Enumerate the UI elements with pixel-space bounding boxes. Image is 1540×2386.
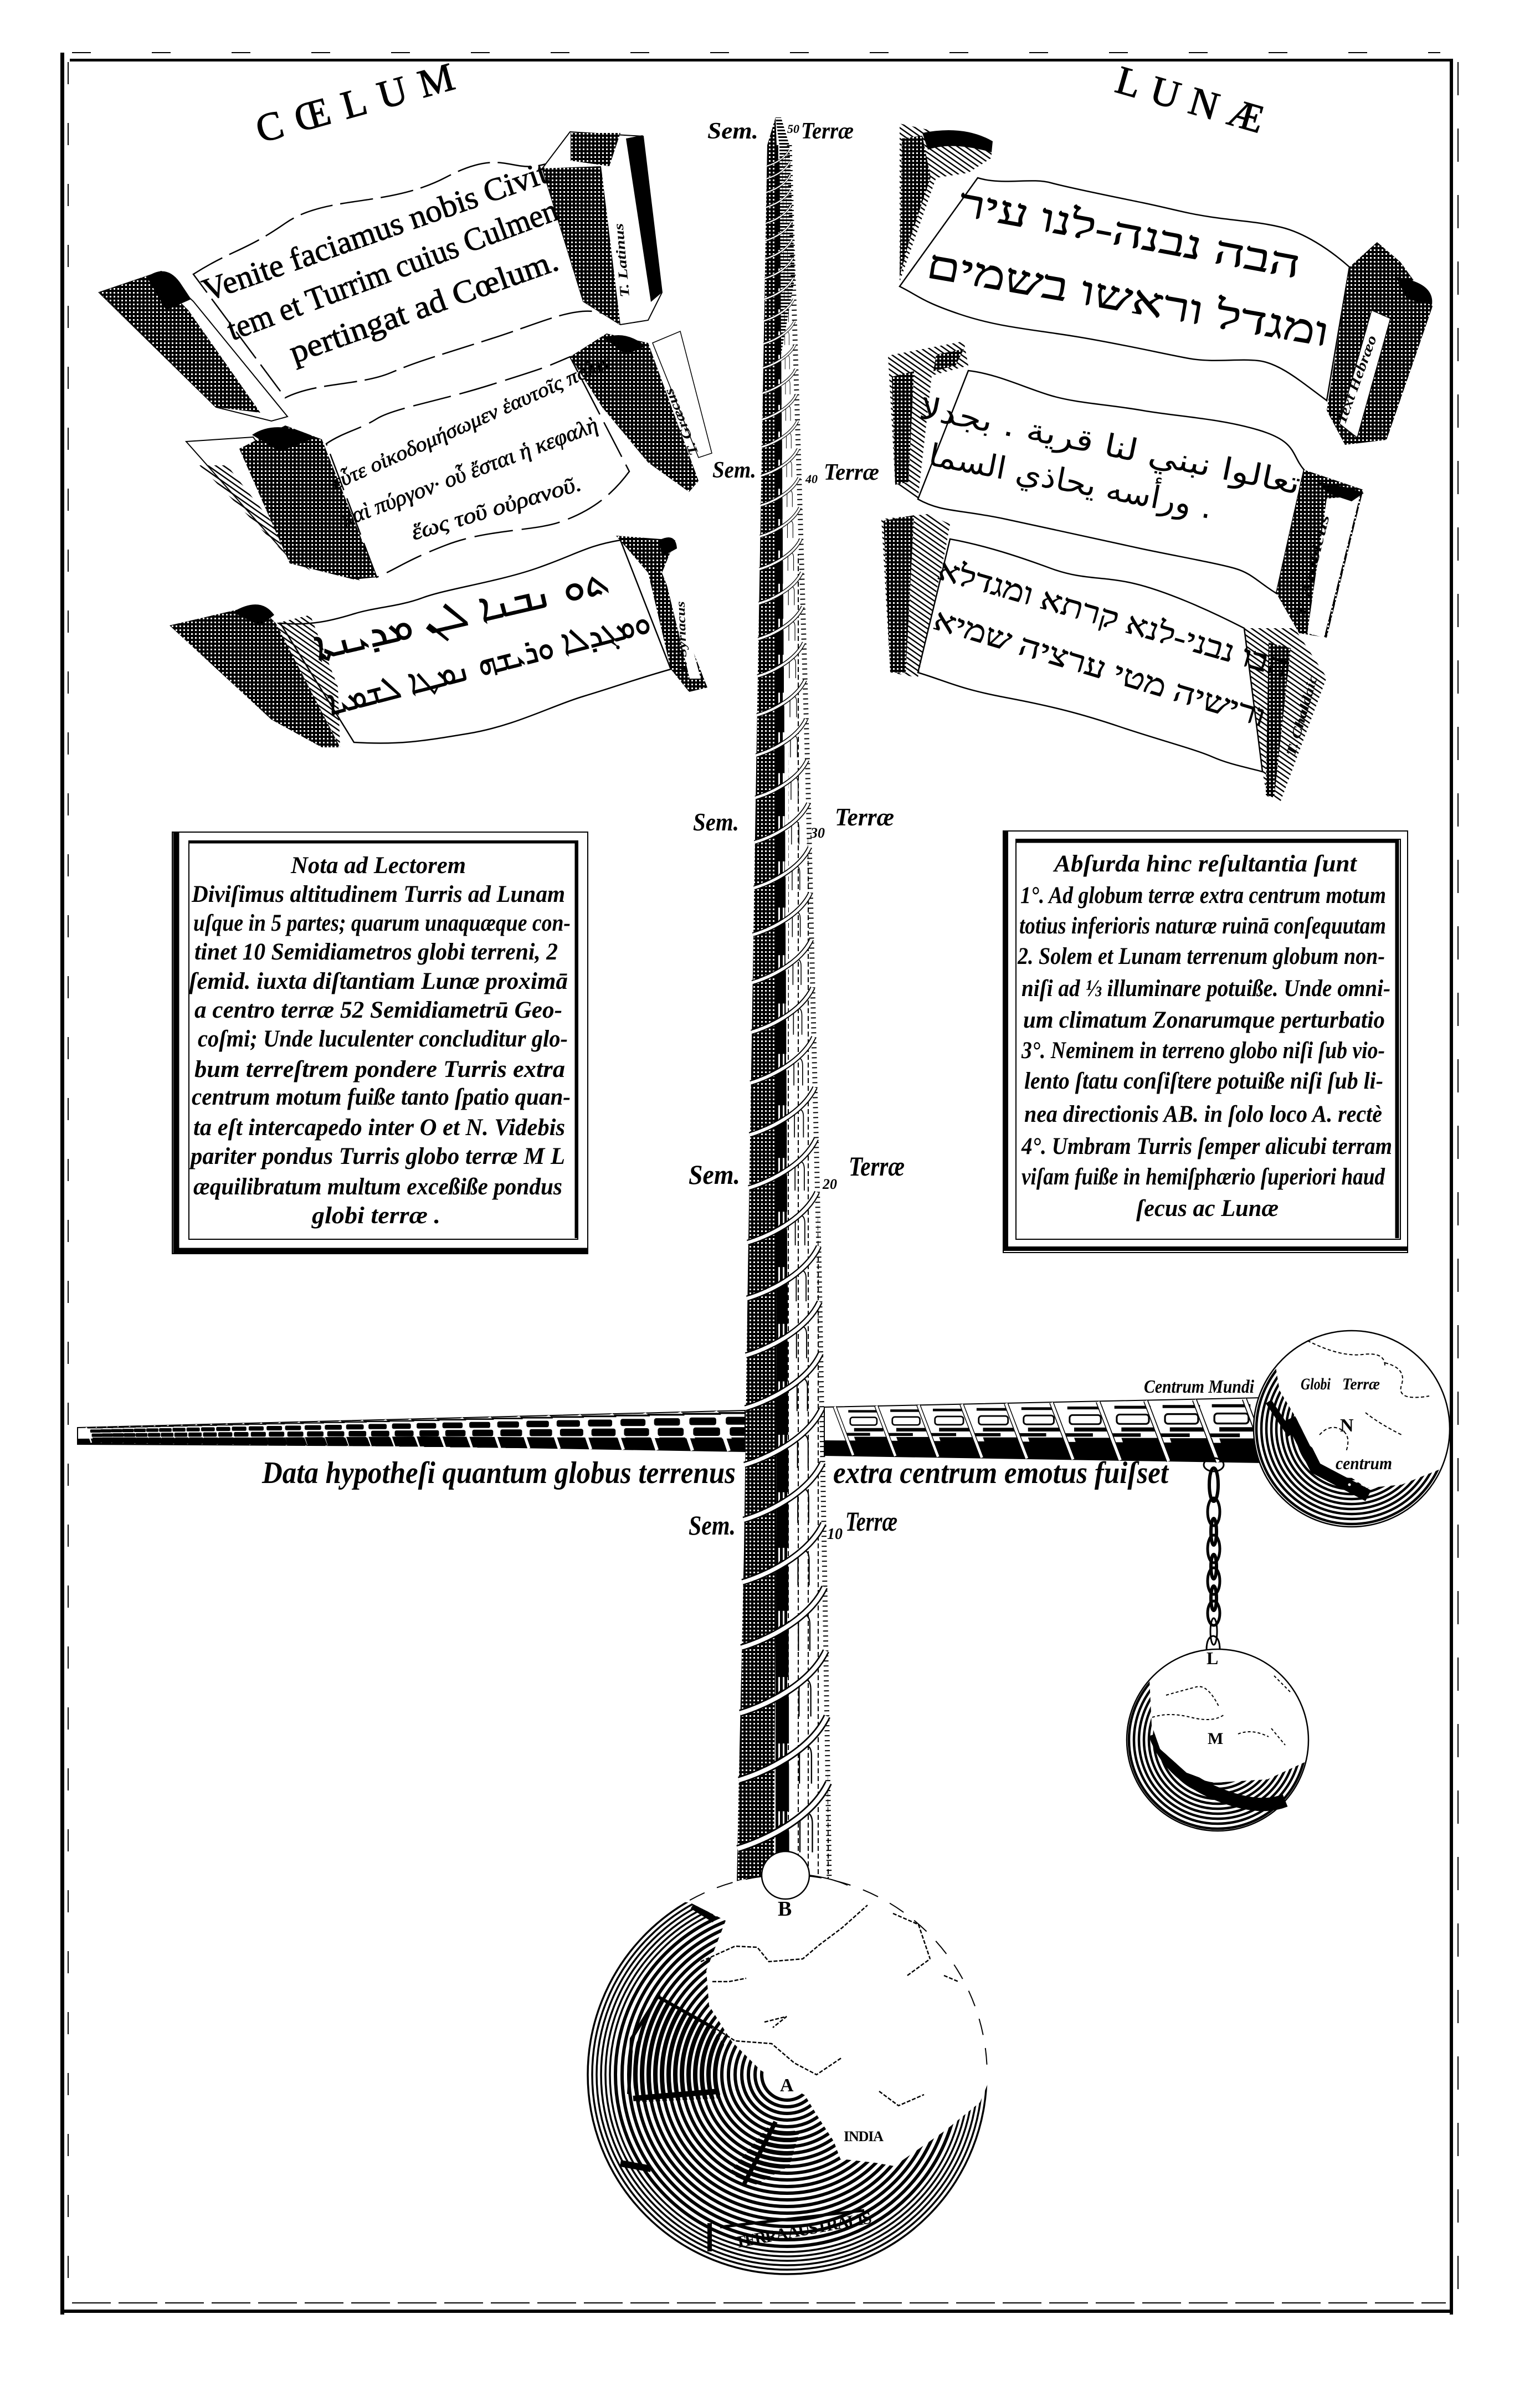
note text: ta eſt intercapedo inter O et N. Videbis	[193, 1115, 565, 1141]
box frame	[172, 832, 588, 1254]
note text: uſque in 5 partes; quarum unaquæque con-	[193, 910, 571, 936]
left roll	[900, 124, 993, 282]
note text: centrum motum fuiße tanto ſpatio quan-	[192, 1084, 571, 1110]
label: 30 semidiameters: Sem.	[693, 808, 739, 836]
scroll: Greek text	[186, 331, 712, 579]
absurdities text: lento ſtatu conſiſtere potuiße niſi ſub li-	[1024, 1068, 1383, 1094]
absurdities text: Abſurda hinc reſultantia ſunt	[1053, 851, 1358, 877]
letter N: N	[1340, 1415, 1354, 1436]
Hebrew inscription	[923, 182, 1332, 355]
Latin inscription	[198, 154, 563, 370]
globe labels: centrum	[1336, 1453, 1392, 1473]
label: 10 semidiameters: 10	[827, 1526, 843, 1543]
Chaldaic inscription: ורישיה מטי ערציה שמיא	[930, 603, 1270, 733]
absurdities text	[1017, 851, 1392, 1222]
label: 10 semidiameters: Terræ	[845, 1506, 897, 1537]
scroll: Arabic text	[888, 341, 1364, 638]
left roll	[170, 604, 340, 747]
letter L: L	[1207, 1648, 1218, 1668]
letter A: A	[780, 2075, 794, 2096]
chain	[1204, 1458, 1224, 1650]
coastlines	[1152, 1676, 1291, 1745]
label: Terra Australis: TERRA AUSTRALIS	[733, 2209, 873, 2252]
note text: coſmi; Unde luculenter concluditur glo-	[198, 1026, 568, 1052]
note text	[188, 853, 571, 1229]
label: 10 semidiameters: Sem.	[689, 1510, 736, 1541]
Arabic inscription: تعالوا نبني لنا قرية . بجدلا	[916, 390, 1303, 502]
Greek inscription: ἕως τοῦ οὐρανοῦ.	[408, 471, 584, 545]
Arabic inscription: ورأسه يحاذي السما .	[926, 434, 1216, 526]
large globe: earth	[587, 1875, 987, 2275]
label: 50 semidiameters: 50	[787, 122, 799, 136]
globe labels: Terræ	[1342, 1375, 1380, 1393]
Latin inscription: tem et Turrim cuius Culmen	[222, 192, 563, 347]
absurdities text: 4°. Umbram Turris ſemper alicubi terram	[1021, 1133, 1392, 1159]
label: Centrum Mundi: Centrum Mundi	[1144, 1377, 1254, 1397]
Greek inscription	[328, 350, 615, 545]
caption: Data hypothesi	[261, 1456, 1169, 1490]
label: T. Syriacus: T. Syriacus	[673, 601, 690, 674]
Chaldaic inscription: הבו נבני-לנא קרתא ומגדלא	[935, 553, 1292, 684]
right roll	[1327, 242, 1433, 445]
Arabic inscription	[916, 390, 1303, 526]
horizontal tower arm, right	[824, 1398, 1323, 1463]
absurdities text: nea directionis AB. in ſolo loco A. rectè	[1024, 1101, 1382, 1127]
shading rings	[1255, 1368, 1439, 1526]
note text: bum terreſtrem pondere Turris extra	[194, 1056, 565, 1082]
label: T. Graecus: T. Græcus	[662, 386, 702, 457]
right roll	[1244, 628, 1327, 801]
label: India: INDIA	[844, 2128, 884, 2144]
label: T. Arabicus: T. Arabicus	[1293, 514, 1333, 619]
title: Coelum: CŒLUM	[251, 53, 465, 151]
Syriac inscription: ܘܡܓܕܠܐ ܘܪܝܫܗ ܢܡܛܐ ܠܫܡܝܐ	[322, 601, 655, 724]
right roll	[1276, 470, 1364, 638]
coastlines	[701, 1905, 958, 2106]
absurdities text: ſecus ac Lunæ	[1136, 1195, 1279, 1222]
box frame	[1003, 831, 1408, 1253]
height labels	[689, 119, 905, 1543]
horizontal tower arm, left	[78, 1410, 764, 1451]
note text: Diviſimus altitudinem Turris ad Lunam	[191, 881, 565, 907]
label: 20 semidiameters: 20	[822, 1176, 837, 1192]
label: 20 semidiameters	[689, 1151, 905, 1192]
note text: Nota ad Lectorem	[290, 853, 466, 879]
caption: Data hypothesi: Data hypotheſi quantum globus terrenus	[261, 1456, 736, 1490]
absurdities text: niſi ad ⅓ illuminare potuiße. Unde omni-	[1021, 976, 1390, 1002]
label: 30 semidiameters: 30	[810, 825, 825, 841]
globe labels: Globi	[1301, 1375, 1331, 1393]
scroll: Chaldaic text	[881, 514, 1327, 801]
Greek inscription: καὶ πύργον· οὗ ἔσται ἡ κεφαλὴ	[337, 412, 601, 531]
label: T. Latinus: T. Latinus	[612, 223, 633, 298]
label: 40 semidiameters: Terræ	[824, 460, 879, 485]
point B circle: B	[778, 1897, 792, 1921]
label: 50 semidiameters: Terræ	[801, 119, 854, 144]
globe labels	[1301, 1375, 1392, 1473]
right roll	[616, 536, 707, 692]
label: 20 semidiameters: Terræ	[849, 1151, 905, 1182]
small globe N: displaced earth	[1254, 1331, 1450, 1527]
label: T. Chaldaic: T. Chaldaic	[1284, 674, 1321, 758]
Greek inscription: εὗτε οἰκοδομήσωμεν ἑαυτοῖς πόλιν	[328, 350, 615, 494]
shading rings	[1128, 1681, 1305, 1830]
Hebrew inscription: ומגדל וראשו בשמים	[923, 242, 1332, 355]
box: Absurda hinc resultantia sunt	[1003, 831, 1408, 1253]
note text: ſemid. iuxta diſtantiam Lunæ proximā	[189, 968, 568, 994]
Chaldaic inscription	[930, 553, 1292, 733]
coastlines	[1307, 1341, 1429, 1451]
caption: Data hypothesi: extra centrum emotus fuiſset	[833, 1456, 1169, 1490]
absurdities text: 2. Solem et Lunam terrenum globum non-	[1017, 943, 1385, 969]
scroll: Syriac text	[170, 536, 707, 747]
Syriac inscription	[309, 557, 655, 724]
absurdities text: totius inferioris naturæ ruinā conſequutam	[1019, 913, 1386, 939]
absurdities text: viſam fuiße in hemiſphærio ſuperiori haud	[1021, 1164, 1385, 1190]
label: 30 semidiameters	[693, 803, 894, 841]
note text: a centro terræ 52 Semidiametrū Geo-	[194, 997, 562, 1023]
right roll	[542, 132, 662, 325]
absurdities text: um climatum Zonarumque perturbatio	[1023, 1007, 1385, 1033]
label: 40 semidiameters: Sem.	[712, 458, 756, 483]
note text: tinet 10 Semidiametros globi terreni, 2	[194, 939, 558, 965]
label: 40 semidiameters: 40	[805, 472, 818, 486]
left roll	[99, 271, 288, 421]
box: Nota ad Lectorem	[172, 832, 588, 1254]
title: Lunae: LUNÆ	[1111, 57, 1277, 144]
Latin inscription: pertingat ad Cœlum.	[285, 242, 563, 370]
letter M: M	[1208, 1730, 1223, 1748]
label: 10 semidiameters	[689, 1506, 897, 1543]
left roll	[888, 341, 968, 499]
point O	[1347, 1482, 1352, 1487]
absurdities text: 3°. Neminem in terreno globo niſi ſub vio-	[1021, 1038, 1385, 1064]
right roll	[570, 331, 712, 492]
scroll: Latin text	[99, 132, 662, 421]
note text: æquilibratum multum exceßiße pondus	[193, 1174, 562, 1200]
Hebrew inscription: הבה נבנה-לנו עיר	[956, 182, 1304, 287]
left roll	[881, 514, 950, 678]
note text: globi terræ .	[311, 1203, 440, 1229]
label: Text Hebraeo: Text Hebræo	[1333, 333, 1380, 426]
label: 50 semidiameters	[707, 119, 854, 144]
small globe LM: counterweight	[1127, 1648, 1308, 1831]
label: 40 semidiameters	[712, 458, 879, 486]
Syriac inscription: ܬܘ ܢܒܢܐ ܠܢ ܡܕܝܢܬܐ	[309, 557, 614, 670]
absurdities text: 1°. Ad globum terræ extra centrum motum	[1020, 882, 1386, 909]
shading rings	[588, 1875, 987, 2274]
note text: pariter pondus Turris globo terræ M L	[188, 1143, 565, 1169]
tower of Babel	[737, 117, 829, 1884]
label: 20 semidiameters: Sem.	[689, 1159, 740, 1190]
label: 50 semidiameters: Sem.	[707, 119, 758, 144]
point B circle	[762, 1851, 848, 1921]
scroll: Hebrew text	[900, 124, 1433, 445]
Latin inscription: Venite faciamus nobis Civit	[198, 154, 552, 308]
label: 30 semidiameters: Terræ	[835, 803, 894, 831]
left roll	[186, 425, 377, 579]
